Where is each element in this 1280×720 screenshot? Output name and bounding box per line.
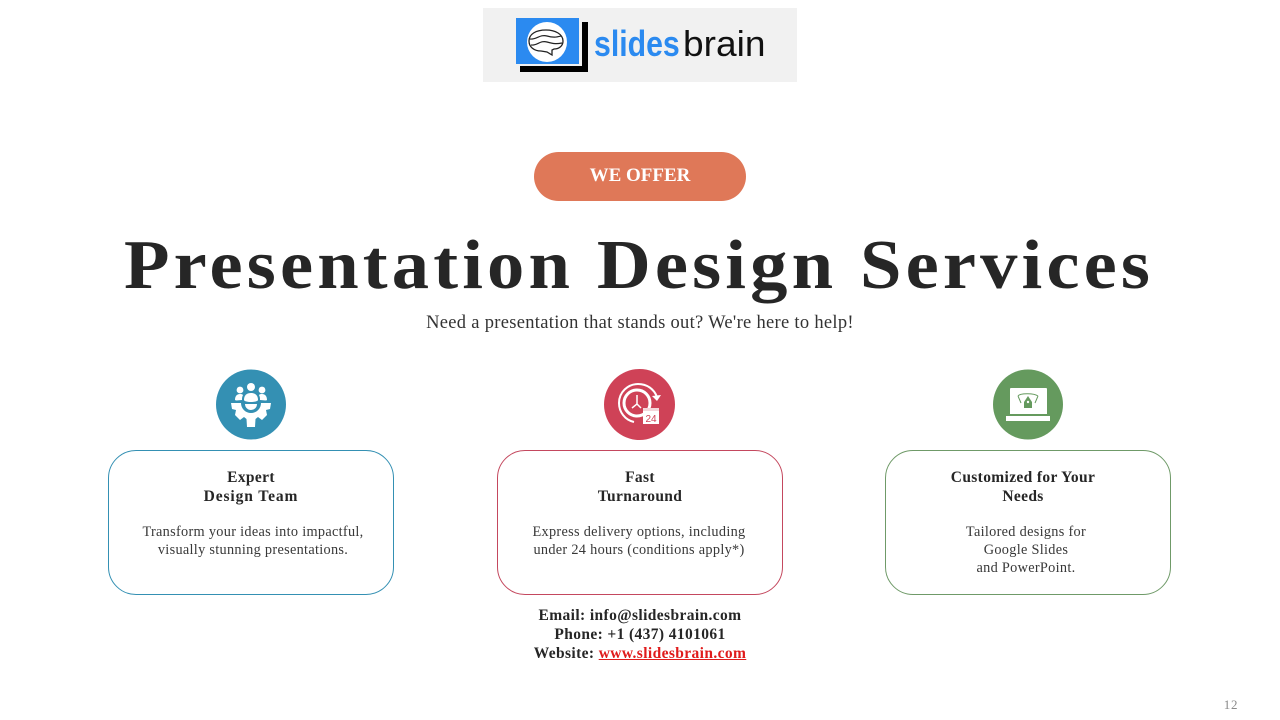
card heading: Fast bbox=[625, 469, 655, 486]
logo wordmark: brain bbox=[683, 23, 765, 64]
card heading bbox=[598, 469, 682, 505]
badge: we offer bbox=[534, 152, 746, 201]
card text: Tailored designs for bbox=[966, 524, 1086, 540]
card text: under 24 hours (conditions apply*) bbox=[533, 542, 745, 558]
subtitle: Need a presentation that stands out? We're here to help! bbox=[426, 313, 854, 333]
panel: expert design team bbox=[108, 450, 394, 595]
logo wordmark: slides bbox=[594, 23, 680, 64]
card heading: Customized for Your bbox=[951, 469, 1095, 486]
panel: customized for your needs bbox=[885, 450, 1171, 595]
logo bbox=[483, 8, 797, 82]
icon: 24 hour clock bbox=[604, 369, 675, 440]
card heading bbox=[951, 469, 1095, 505]
card text: Express delivery options, including bbox=[532, 524, 746, 540]
card text: and PowerPoint. bbox=[976, 560, 1076, 576]
icon: 24 hour clock: 24 bbox=[645, 414, 657, 425]
card text bbox=[142, 524, 364, 558]
card heading: Design Team bbox=[204, 488, 298, 505]
contact details: Email: info@slidesbrain.com bbox=[539, 607, 741, 624]
card heading bbox=[204, 469, 298, 505]
card text bbox=[532, 524, 746, 558]
card heading: Turnaround bbox=[598, 488, 682, 505]
card text: Transform your ideas into impactful, bbox=[142, 524, 364, 540]
card text bbox=[966, 524, 1086, 576]
icon: team gear bbox=[216, 370, 286, 440]
contact details: Phone: +1 (437) 4101061 bbox=[554, 626, 726, 643]
badge: we offer: WE OFFER bbox=[590, 165, 690, 186]
card text: Google Slides bbox=[984, 542, 1068, 558]
contact details: Website: www.slidesbrain.com bbox=[534, 645, 746, 662]
card heading: Expert bbox=[227, 469, 275, 486]
logo wordmark bbox=[594, 23, 765, 64]
icon: design laptop bbox=[993, 370, 1063, 440]
panel: fast turnaround bbox=[497, 450, 783, 595]
card heading: Needs bbox=[1002, 488, 1044, 505]
title: Presentation Design Services bbox=[124, 227, 1154, 304]
card text: visually stunning presentations. bbox=[158, 542, 348, 558]
page number: 12 bbox=[1224, 697, 1238, 712]
contact details bbox=[534, 607, 746, 662]
logo icon bbox=[516, 18, 588, 72]
